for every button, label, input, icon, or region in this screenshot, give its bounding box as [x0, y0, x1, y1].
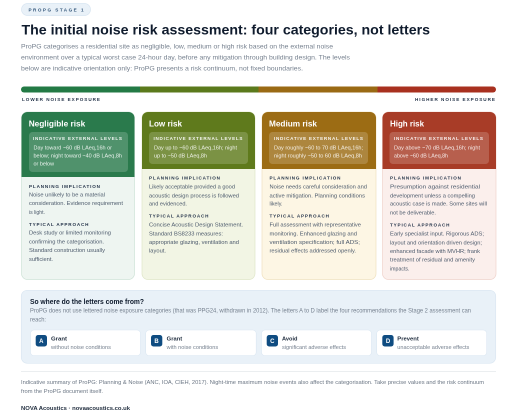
- levels box: [149, 132, 248, 164]
- planning implication: is light.: [29, 210, 45, 216]
- panel: high risk: [382, 112, 496, 280]
- panel: where the letters come from: [21, 290, 496, 363]
- levels box: Day toward ~60 dB LAeq,16h or: [34, 146, 112, 152]
- planning implication: Presumption against residential: [390, 185, 480, 191]
- typical approach: treatment of residual and amenity: [390, 258, 475, 264]
- levels box: or below: [34, 162, 54, 168]
- planning implication: PLANNING IMPLICATION: [149, 176, 221, 181]
- heading: So where do the letters come from?: [30, 299, 144, 306]
- recommendation B: B: [154, 339, 159, 345]
- levels box: night roughly ~50 to 60 dB LAeq,8h: [274, 154, 362, 160]
- planning implication: Noise needs careful consideration and: [270, 185, 367, 191]
- typical approach: TYPICAL APPROACH: [390, 222, 450, 227]
- recommendation B: Grant: [167, 336, 182, 342]
- heading: medium risk: Medium risk: [269, 118, 317, 128]
- recommendation A: Grant: [51, 336, 67, 342]
- recommendation D: D: [386, 339, 391, 345]
- source note: Indicative summary of ProPG: Planning & Noise (ANC, IOA, CIEH, 2017). Night-time maximum noise events also affect the categorisation. Take precise values and the risk continuum: [21, 380, 484, 386]
- recommendation D: [377, 330, 487, 356]
- source note: from the ProPG document itself.: [21, 389, 103, 395]
- planning implication: PLANNING IMPLICATION: [390, 176, 462, 181]
- levels box: [269, 132, 368, 164]
- levels box: Day up to ~60 dB LAeq,16h; night: [154, 146, 238, 152]
- recommendation B: [146, 330, 256, 356]
- planning implication: consideration. Evidence requirement: [29, 201, 123, 207]
- recommendation A: A: [39, 339, 44, 345]
- typical approach: Early specialist input. Rigorous ADS;: [390, 231, 484, 237]
- typical approach: enhanced facade with MVHR; frank: [390, 249, 480, 255]
- typical approach: Concise Acoustic Design Statement.: [149, 223, 243, 229]
- typical approach: [270, 214, 361, 255]
- planning implication: Noise unlikely to be a material: [29, 192, 105, 198]
- title: The initial noise risk assessment: four categories, not letters: [22, 22, 430, 38]
- levels box: up to ~50 dB LAeq,8h: [154, 154, 207, 160]
- planning implication: [149, 176, 239, 208]
- heading: negligible risk: Negligible risk: [29, 118, 86, 128]
- typical approach: Standard BS8233 measures:: [149, 231, 223, 237]
- typical approach: layout and orientation driven design;: [390, 240, 482, 246]
- recommendation D: Prevent: [397, 336, 419, 342]
- typical approach: layout.: [149, 249, 166, 255]
- planning implication: Likely acceptable provided a good: [149, 185, 235, 191]
- stage pill: [22, 4, 90, 16]
- intro text: ProPG categorises a residential site as negligible, low, medium or high risk based on the external noise: [21, 45, 334, 51]
- levels box: INDICATIVE EXTERNAL LEVELS: [394, 136, 483, 141]
- planning implication: acoustic design process is followed: [149, 193, 239, 199]
- levels box: INDICATIVE EXTERNAL LEVELS: [274, 136, 363, 141]
- planning implication: [29, 184, 123, 216]
- source note: [21, 380, 484, 395]
- levels box: below; night toward ~40 dB LAeq,8h: [34, 154, 122, 160]
- heading: low risk: Low risk: [149, 118, 182, 128]
- typical approach: monitoring. Enhanced glazing and: [270, 231, 357, 237]
- stage pill: PROPG STAGE 1: [28, 7, 84, 12]
- typical approach: TYPICAL APPROACH: [270, 214, 330, 219]
- recommendation A: without noise conditions: [50, 345, 111, 351]
- planning implication: not be deliverable.: [390, 210, 436, 216]
- planning implication: active mitigation. Planning conditions: [270, 193, 365, 199]
- levels box: INDICATIVE EXTERNAL LEVELS: [154, 136, 242, 141]
- planning implication: [270, 176, 367, 208]
- intro text: below are indicative orientation only: ProPG presents a risk continuum, not fixed boundaries.: [21, 67, 303, 73]
- typical approach: residual effects addressed openly.: [270, 249, 356, 255]
- panel: low risk: [142, 112, 255, 280]
- typical approach: ventilation specification; full ADS;: [270, 240, 360, 246]
- planning implication: and evidenced.: [149, 202, 187, 208]
- planning implication: PLANNING IMPLICATION: [270, 176, 341, 181]
- credit: NOVA Acoustics · novaacoustics.co.uk: [21, 406, 131, 412]
- planning implication: development unless a compelling: [390, 193, 475, 199]
- recommendation C: Avoid: [282, 336, 298, 342]
- explanation: ProPG does not use lettered noise exposure categories (that was PPG24, withdrawn in 2012). The letters A to D label the four recommendations the Stage 2 assessment can: [30, 308, 471, 314]
- planning implication: [390, 176, 487, 216]
- label: higher noise exposure: HIGHER NOISE EXPOSURE: [415, 97, 495, 102]
- explanation: [30, 308, 471, 323]
- levels box: Day roughly ~60 to 70 dB LAeq,16h;: [274, 146, 363, 152]
- panel: negligible risk: [22, 112, 134, 280]
- typical approach: Desk study or limited monitoring: [29, 231, 111, 237]
- planning implication: likely.: [270, 202, 283, 208]
- typical approach: confirming the categorisation.: [29, 240, 104, 246]
- explanation: reach:: [30, 317, 46, 323]
- recommendation D: unacceptable adverse effects: [397, 345, 470, 351]
- planning implication: acoustic case is made. Some sites will: [390, 202, 487, 208]
- levels box: Day above ~70 dB LAeq,16h; night: [394, 146, 481, 152]
- typical approach: [29, 222, 111, 263]
- risk continuum bar: [21, 86, 496, 92]
- typical approach: Full assessment with representative: [270, 223, 361, 229]
- typical approach: sufficient.: [29, 257, 53, 263]
- typical approach: Standard construction usually: [29, 248, 105, 254]
- levels box: [390, 132, 489, 164]
- recommendation B: with noise conditions: [166, 345, 219, 351]
- levels box: above ~60 dB LAeq,8h: [394, 154, 448, 160]
- planning implication: PLANNING IMPLICATION: [29, 184, 101, 189]
- typical approach: TYPICAL APPROACH: [149, 214, 209, 219]
- levels box: INDICATIVE EXTERNAL LEVELS: [33, 136, 122, 141]
- panel: medium risk: [262, 112, 376, 280]
- typical approach: impacts.: [390, 266, 410, 272]
- recommendation C: significant adverse effects: [282, 345, 346, 351]
- label: lower noise exposure: LOWER NOISE EXPOSURE: [22, 97, 100, 102]
- levels box: [29, 132, 128, 172]
- typical approach: appropriate glazing, ventilation and: [149, 240, 239, 246]
- intro text: environment over a typical worst case 24-hour day, before any mitigation through building design. The levels: [21, 56, 350, 62]
- heading: high risk: High risk: [390, 118, 424, 128]
- intro text: [21, 45, 350, 73]
- typical approach: [390, 222, 484, 272]
- recommendation C: C: [270, 339, 275, 345]
- typical approach: [149, 214, 243, 255]
- recommendation C: [262, 330, 372, 356]
- typical approach: TYPICAL APPROACH: [29, 222, 89, 227]
- recommendation A: [30, 330, 140, 356]
